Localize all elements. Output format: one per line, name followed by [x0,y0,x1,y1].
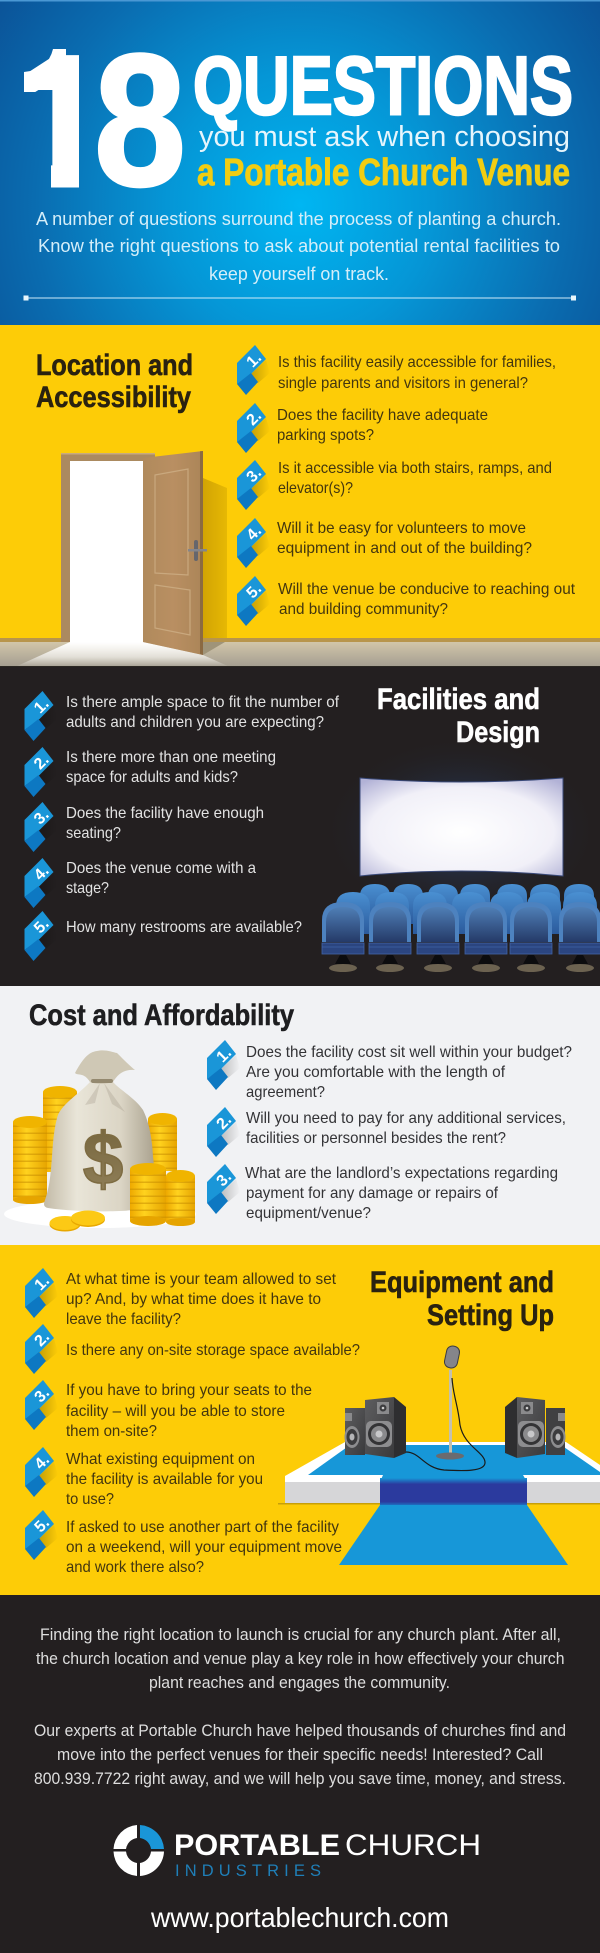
item 1: 1. [214,1045,235,1066]
closing paragraph 2: 800.939.7722 right away, and we will help you save time, money, and stress. [34,1769,566,1788]
item 4 [237,518,532,568]
illustration: stage with speakers and microphone [278,1345,600,1565]
heading: facilities and design [377,683,540,749]
panel: cost and affordability [0,986,600,1245]
item 1 [207,1040,572,1101]
item 5 [25,1510,342,1576]
item 4: 4. [32,1452,53,1473]
item 1: agreement? [246,1084,325,1101]
item 2: Does the facility have adequate [277,407,488,424]
item 5 [24,911,302,961]
heading: equipment and setting up: Equipment and [370,1266,554,1299]
item 3: Is it accessible via both stairs, ramps, and [278,460,552,477]
icon: logo ring [114,1825,164,1876]
intro text: keep yourself on track. [209,263,389,284]
title number: 18: 1 [10,16,115,226]
item 3: Does the facility have enough [66,805,264,822]
item 1: Is there ample space to fit the number of [66,694,340,711]
item 2: Is there any on-site storage space available? [66,1342,360,1359]
item 1: adults and children you are expecting? [66,714,324,731]
item 1: At what time is your team allowed to set [66,1271,337,1288]
item 4: 4. [244,523,265,544]
item 3: payment for any damage or repairs of [246,1185,499,1202]
item 5: on a weekend, will your equipment move [66,1539,342,1556]
item 2 [25,1324,360,1374]
item 5: If asked to use another part of the facility [66,1519,339,1536]
item 1: single parents and visitors in general? [278,375,528,392]
logo: portable church industries: CHURCH [345,1829,481,1862]
item 2: Is there more than one meeting [66,749,276,766]
item 2: 2. [244,408,265,429]
item 4: Will it be easy for volunteers to move [277,520,526,537]
intro text: Know the right questions to ask about potential rental facilities to [38,235,560,256]
heading: location and accessibility: Accessibility [36,381,191,414]
heading: equipment and setting up [370,1266,554,1332]
item 2: 2. [32,1329,53,1350]
item 2: parking spots? [277,427,374,444]
heading: cost and affordability: Cost and Affordability [29,999,294,1032]
closing paragraph 1: Finding the right location to launch is crucial for any church plant. After all, [40,1625,561,1644]
logo: portable church industries [114,1825,481,1880]
heading: facilities and design: Facilities and [377,683,540,716]
title number: 18: 8 [94,15,186,225]
list: facilities questions [24,691,340,961]
item 1: Is this facility easily accessible for families, [278,354,556,371]
website url: www.portablechurch.com [150,1902,449,1933]
illustration: cinema screen and seats [321,735,600,972]
closing paragraph 2: Our experts at Portable Church have helped thousands of churches find and [34,1721,566,1740]
heading: equipment and setting up: Setting Up [427,1299,554,1332]
list: cost questions [207,1040,572,1222]
illustration: money bag and coins [4,1050,196,1232]
item 1: up? And, by what time does it have to [66,1291,321,1308]
item 5: Will the venue be conducive to reaching out [278,581,576,598]
item 2 [207,1107,566,1157]
panel: header [0,0,600,325]
item 3: 3. [214,1169,235,1190]
item 3: 3. [31,807,53,828]
item 2 [24,747,276,797]
item 4: 4. [31,863,53,884]
item 3: elevator(s)? [278,480,353,497]
item 4: to use? [66,1491,114,1508]
item 3 [25,1380,312,1440]
title number: 18 [24,49,182,188]
item 5: and building community? [279,601,448,618]
item 3: seating? [66,825,121,842]
item 3: equipment/venue? [246,1205,371,1222]
intro text: A number of questions surround the process of planting a church. [36,208,561,229]
item 3: If you have to bring your seats to the [66,1382,312,1399]
item 1 [24,691,340,741]
item 2: facilities or personnel besides the rent? [246,1130,506,1147]
panel: closing and contact [0,1595,600,1953]
list: equipment questions [25,1268,360,1576]
heading: location and accessibility: Location and [36,349,193,382]
panel: equipment and setting up [0,1245,600,1595]
item 3 [24,802,264,852]
heading: facilities and design: Design [456,716,540,749]
closing paragraph 1: plant reaches and engages the community. [149,1673,450,1692]
item 2: space for adults and kids? [66,769,238,786]
panel: location and accessibility [0,325,600,667]
item 1 [237,345,556,395]
item 4: stage? [66,880,109,897]
list: location questions [237,345,576,626]
item 3: them on-site? [66,1423,157,1440]
closing paragraph 1: the church location and venue play a key role in how effectively your church [36,1649,564,1668]
item 3: What are the landlord’s expectations regarding [245,1165,558,1182]
item 5: 5. [31,916,53,937]
item 2: 2. [31,752,53,773]
logo: portable church industries: INDUSTRIES [175,1862,321,1880]
item 1: 1. [32,1273,53,1294]
item 2: 2. [214,1112,235,1133]
subtitle: you must ask when choosing [199,121,570,153]
item 1: 1. [244,350,265,371]
closing paragraph 2 [34,1721,566,1788]
item 3: facility – will you be able to store [66,1403,285,1420]
item 5 [237,576,576,626]
panel: facilities and design [0,667,600,986]
item 3 [207,1164,558,1222]
illustration: open door [0,451,600,667]
item 2: Will you need to pay for any additional services, [246,1110,566,1127]
heading: location and accessibility [36,349,193,414]
closing paragraph 2: move into the perfect venues for their specific needs! Interested? Call [57,1745,543,1764]
closing paragraph 1 [36,1625,564,1692]
item 2 [237,403,488,453]
item 4: the facility is available for you [66,1471,263,1488]
intro text [36,208,561,284]
item 4 [25,1447,263,1508]
item 4: equipment in and out of the building? [277,540,532,557]
item 1: Does the facility cost sit well within your budget? [246,1044,572,1061]
item 1: 1. [31,696,53,717]
item 5: 5. [32,1515,53,1536]
item 3: 3. [32,1385,53,1406]
logo: portable church industries: PORTABLE [174,1829,340,1862]
item 4: Does the venue come with a [66,860,256,877]
item 4 [24,858,256,908]
item 1: leave the facility? [66,1311,181,1328]
item 4: What existing equipment on [66,1451,255,1468]
item 5: and work there also? [66,1559,204,1576]
item 1: Are you comfortable with the length of [246,1064,506,1081]
item 3 [237,460,552,510]
item 1 [25,1268,337,1328]
item 5: 5. [244,581,265,602]
illustration: money bag and coins: $ [83,1119,123,1200]
item 3: 3. [244,465,265,486]
item 5: How many restrooms are available? [66,919,302,936]
